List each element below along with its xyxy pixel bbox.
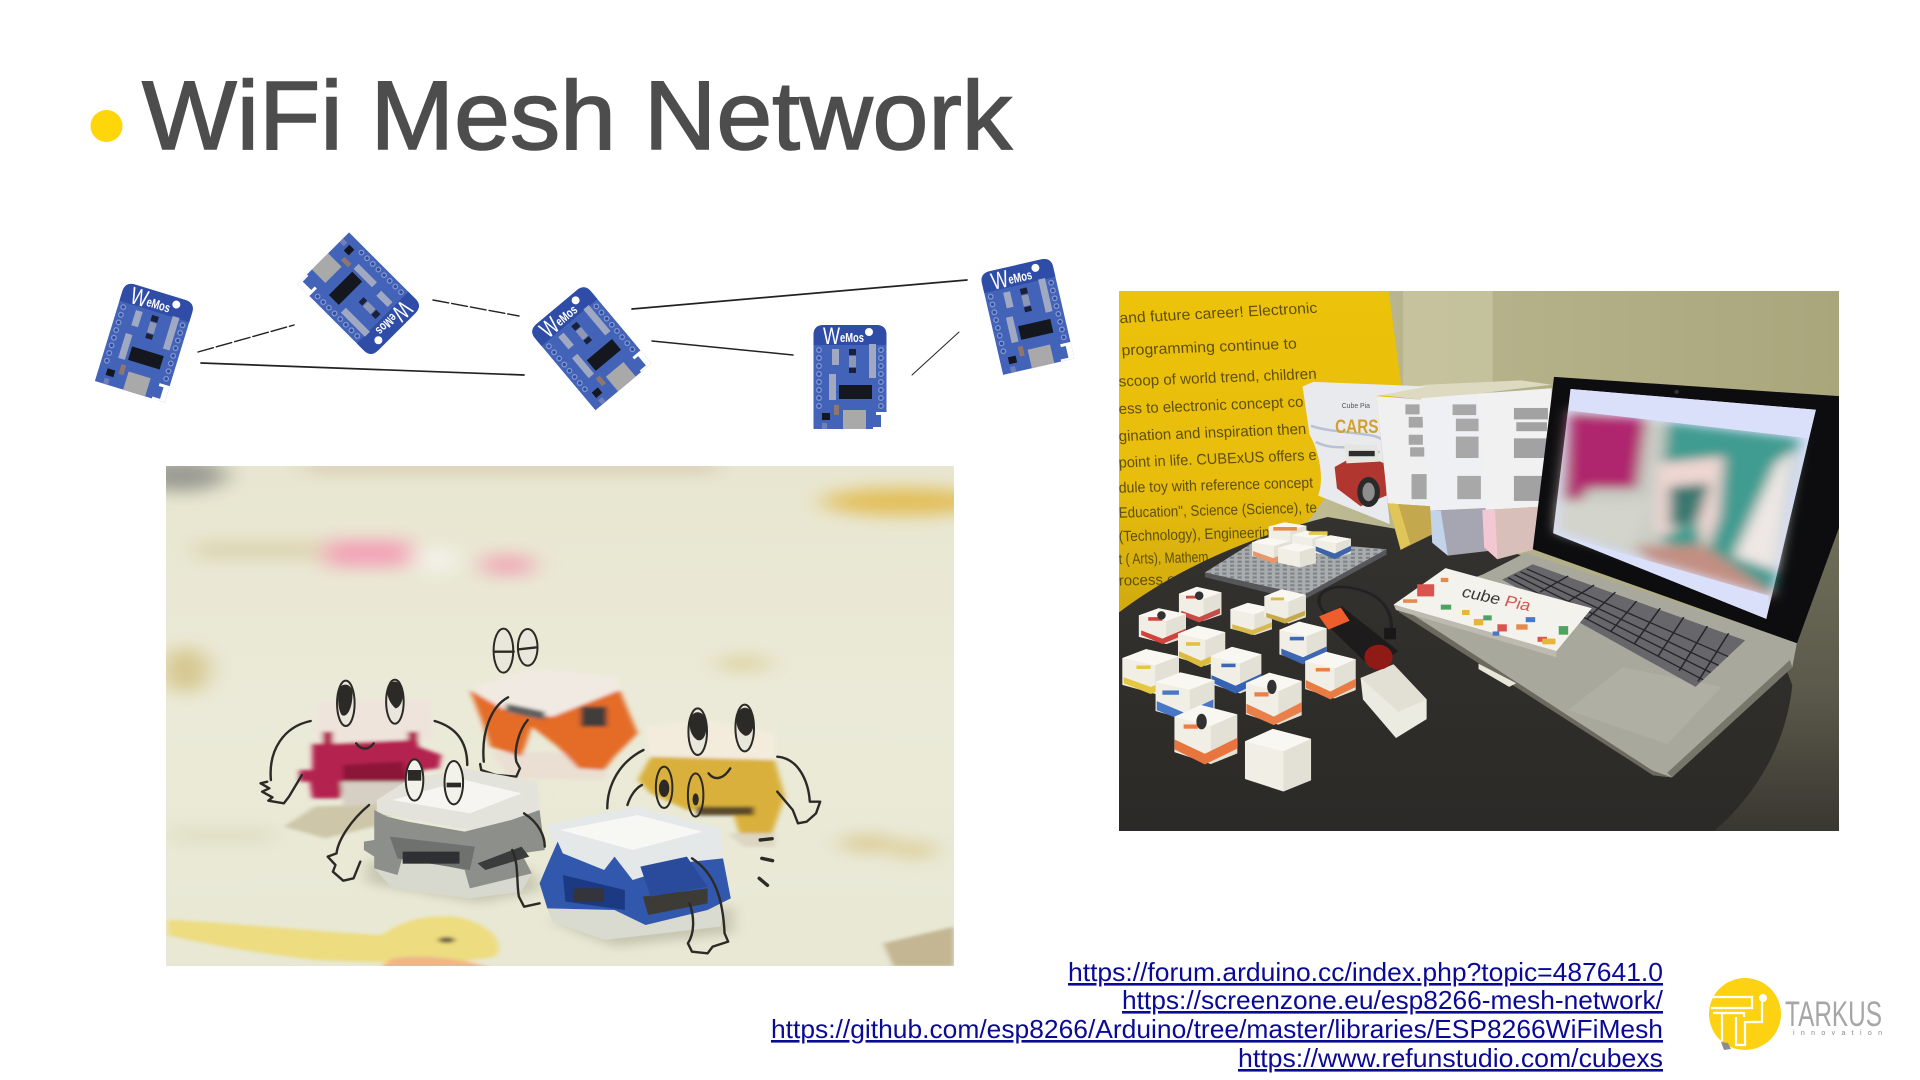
laptop screen picture — [1556, 410, 1799, 596]
icon: WeMos board 3: W — [535, 312, 565, 344]
yellow banner — [1115, 285, 1402, 617]
icon: WeMos board 2: eMos — [373, 311, 400, 338]
icon: WeMos board 5: eMos — [1007, 267, 1033, 287]
duck print — [168, 916, 954, 970]
icon: WeMos board 4 — [814, 323, 886, 429]
link 2: https://screenzone.eu/esp8266-mesh-network/ — [1122, 985, 1664, 1015]
box front: CARS: CARS — [1335, 416, 1379, 437]
link 1: https://forum.arduino.cc/index.php?topic=487641.0 — [1068, 957, 1663, 987]
keyboard — [1502, 564, 1745, 687]
icon: WeMos board 2 — [297, 232, 424, 359]
banner text: Education", Science (Science), te — [1118, 499, 1317, 521]
logo mark — [1709, 978, 1781, 1050]
banner text: t ( Arts), Mathem — [1118, 548, 1209, 568]
blue cube — [540, 807, 733, 953]
connection lines — [198, 280, 967, 375]
banner text: (Technology), Engineerin — [1118, 524, 1270, 545]
banner text — [1118, 299, 1318, 589]
heading text: WiFi Mesh Network — [142, 61, 1013, 170]
banner text: gination and inspiration then — [1118, 420, 1307, 445]
banner text: and future career! Electronic — [1119, 299, 1318, 327]
red cube — [261, 680, 467, 838]
small logic cubes — [1122, 587, 1427, 791]
icon: WeMos board 4: eMos — [840, 330, 864, 345]
title — [90, 61, 1013, 170]
black round table — [1115, 517, 1792, 831]
box spine 2 — [1421, 394, 1488, 556]
yellow cube — [607, 705, 820, 885]
blurred background — [134, 458, 987, 857]
icon: WeMos board 5: W — [989, 266, 1011, 296]
box front: CARS — [1303, 382, 1427, 524]
back wall — [1115, 285, 1870, 857]
icon: WeMos board 3 — [527, 282, 651, 410]
link 3: https://github.com/esp8266/Arduino/tree/master/libraries/ESP8266WiFiMesh — [771, 1014, 1663, 1044]
tagline: innovation — [1793, 1030, 1882, 1037]
link 4: https://www.refunstudio.com/cubexs — [1238, 1043, 1663, 1073]
icon: WeMos board 1: eMos — [145, 294, 172, 315]
banner text: dule toy with reference concept — [1118, 474, 1314, 496]
banner text: programming continue to — [1121, 335, 1298, 359]
orange cube — [470, 629, 638, 780]
banner text: ess to electronic concept co — [1118, 393, 1304, 417]
battery cylinder with cable — [1319, 587, 1398, 670]
box spine 3 — [1478, 388, 1552, 559]
Cube Pia booklet — [1394, 568, 1592, 657]
icon: WeMos board 4: W — [823, 323, 840, 350]
mesh network diagram — [95, 232, 1074, 429]
icon: WeMos board 3: eMos — [552, 302, 580, 329]
box spine 1 — [1376, 396, 1431, 550]
banner text: rocess o — [1118, 571, 1176, 589]
laptop — [1398, 377, 1839, 777]
icon: WeMos board 5 — [979, 255, 1074, 375]
bullet — [90, 110, 122, 142]
banner text: point in life. CUBExUS offers e — [1118, 446, 1317, 471]
building plate with cubes — [1205, 522, 1387, 601]
icon: WeMos board 1: W — [127, 282, 151, 313]
photo: Cube Pia kit with laptop on a table — [1118, 291, 1839, 831]
icon: WeMos board 1 — [95, 280, 196, 402]
gray cube — [328, 759, 545, 907]
banner text: scoop of world trend, children — [1118, 365, 1317, 390]
logo: Tarkus Innovation — [1709, 978, 1882, 1050]
photo: cube characters on a blanket — [166, 466, 954, 966]
icon: WeMos board 2: W — [386, 295, 417, 326]
Cube Pia booklet: cube Pia — [1459, 582, 1535, 615]
box front: CARS: Cube Pia — [1342, 401, 1370, 410]
product boxes — [1303, 380, 1552, 559]
reference links — [771, 957, 1664, 1073]
